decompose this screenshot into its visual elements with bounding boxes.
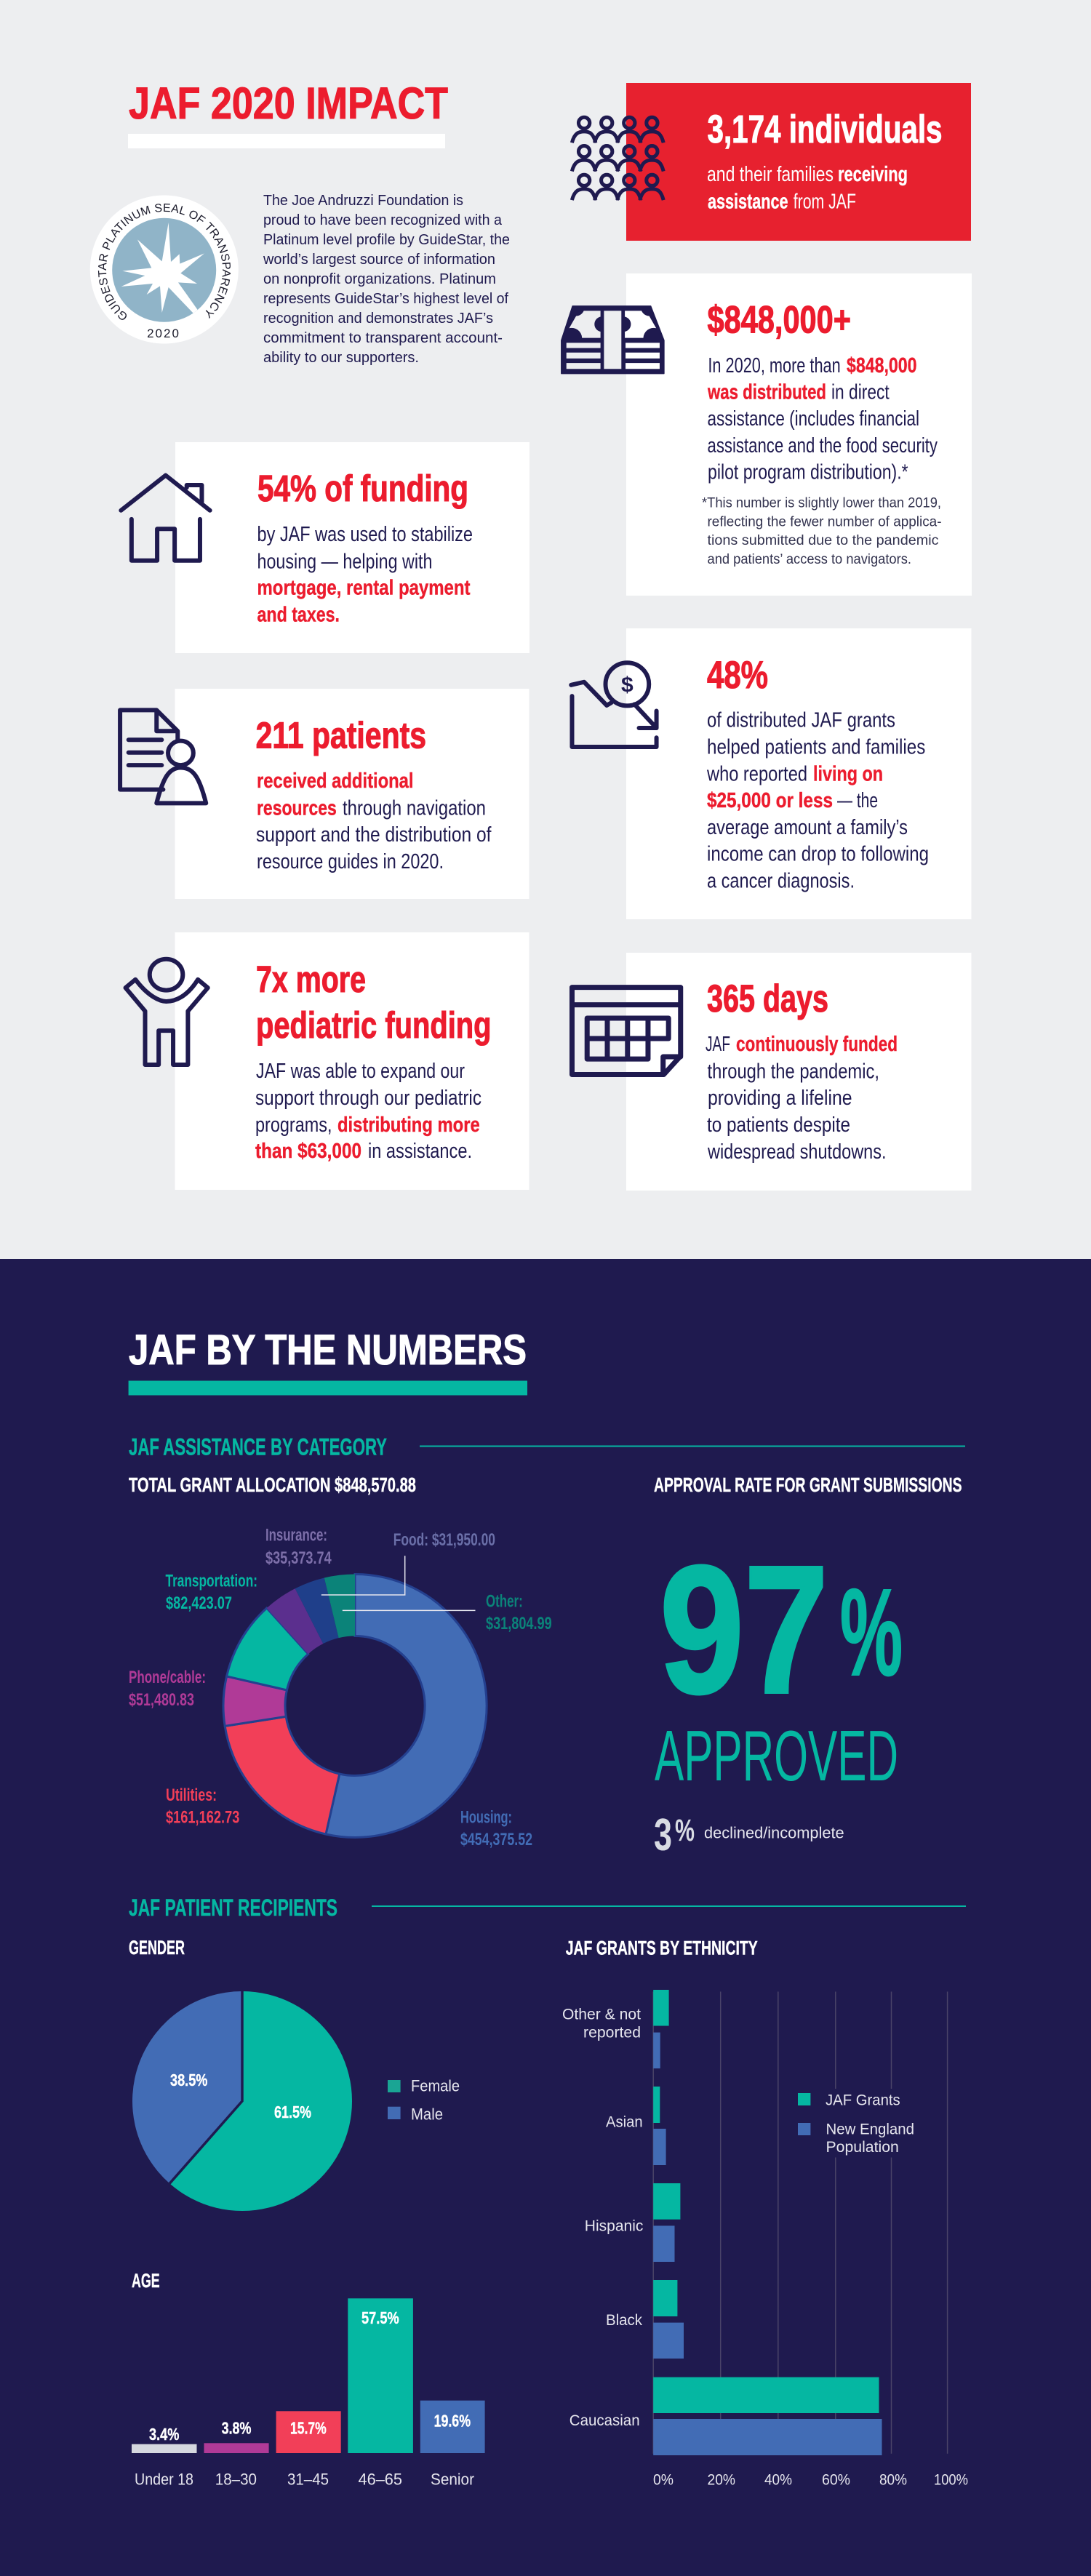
panel: 211 patients: support and the distribution of xyxy=(256,823,492,847)
panel: 365 days: 365 days xyxy=(707,977,828,1020)
bar chart: age: Senior xyxy=(431,2471,474,2489)
panel: $848,000+: $848,000 xyxy=(847,354,916,377)
panel: 54% of funding: 54% of funding xyxy=(257,468,468,509)
panel: 54% of funding xyxy=(121,442,529,653)
bar chart: age: 18–30 xyxy=(215,2471,257,2489)
bar chart: age xyxy=(132,2298,485,2489)
footnote xyxy=(702,496,941,567)
title: JAF 2020 Impact xyxy=(128,79,448,148)
subheading: total grant allocation: TOTAL GRANT ALLOCATION $848,570.88 xyxy=(129,1473,416,1496)
bar chart: grants by ethnicity: Other & not xyxy=(562,2007,641,2023)
subheading: approval rate: APPROVAL RATE FOR GRANT SUBMISSIONS xyxy=(654,1473,962,1496)
panel: 48% of grants xyxy=(571,628,972,919)
bar chart: grants by ethnicity: Black xyxy=(606,2312,642,2329)
icon: group of people xyxy=(572,117,663,200)
bar chart: age: 46–65 xyxy=(358,2471,402,2489)
panel: 7x more pediatric funding: than $63,000 xyxy=(255,1140,361,1163)
panel: 365 days: widespread shutdowns. xyxy=(707,1140,886,1164)
bar chart: grants by ethnicity: Asian xyxy=(606,2114,643,2131)
legend: ethnicity xyxy=(798,2092,914,2156)
donut labels: $82,423.07 xyxy=(166,1593,232,1613)
text block: GuideStar description: on nonprofit organizations. Platinum xyxy=(263,271,496,287)
panel: 48% of grants: 48% xyxy=(707,654,768,697)
bar chart: grants by ethnicity: 60% xyxy=(822,2471,850,2489)
heading: JAF assistance by category: JAF ASSISTANCE BY CATEGORY xyxy=(129,1434,387,1460)
subheading: age: AGE xyxy=(132,2270,160,2292)
panel: 211 patients: resources xyxy=(257,796,337,820)
bar chart: grants by ethnicity: 40% xyxy=(764,2471,792,2489)
panel: $848,000+: assistance (includes financial xyxy=(707,407,919,431)
bar chart: grants by ethnicity: Caucasian xyxy=(570,2412,640,2429)
stat: 3% declined xyxy=(654,1810,844,1860)
panel: 7x more pediatric funding: JAF was able to expand our xyxy=(256,1060,465,1083)
panel: 54% of funding: by JAF was used to stabilize xyxy=(257,523,473,546)
panel: $848,000+: In 2020, more than xyxy=(708,354,841,377)
bar chart: grants by ethnicity: Hispanic xyxy=(585,2218,643,2235)
icon: calendar xyxy=(572,988,681,1075)
panel: 365 days: continuously funded xyxy=(736,1033,898,1056)
panel: 7x more pediatric funding xyxy=(126,932,529,1190)
text block: GuideStar description: proud to have been recognized with a xyxy=(263,212,503,228)
bar chart: age: 31–45 xyxy=(287,2471,329,2489)
section background: numbers xyxy=(0,1259,1091,2576)
text block: GuideStar description: commitment to transparent account- xyxy=(263,330,503,346)
panel: 48% of grants: $25,000 or less xyxy=(707,789,833,812)
panel: $848,000+: assistance and the food security xyxy=(707,434,938,457)
panel: 7x more pediatric funding: distributing more xyxy=(337,1113,480,1137)
icon: GuideStar platinum seal: GUIDESTAR PLATINUM SEAL OF TRANSPARENCY xyxy=(97,204,231,320)
text block: GuideStar description xyxy=(263,193,510,366)
icon: stack of money xyxy=(562,306,664,373)
footnote: *This number is slightly lower than 2019, xyxy=(702,496,941,511)
panel: $848,000+: in direct xyxy=(831,380,890,404)
stat: 3% declined: % xyxy=(675,1813,695,1848)
text block: GuideStar description: The Joe Andruzzi Foundation is xyxy=(263,193,463,209)
heading: JAF by the numbers xyxy=(129,1327,527,1395)
panel: 48% of grants: helped patients and families xyxy=(707,736,925,759)
donut labels: Insurance: xyxy=(265,1525,327,1545)
stat: 97% approved: APPROVED xyxy=(655,1716,898,1796)
panel: 48% of grants: a cancer diagnosis. xyxy=(707,869,855,892)
panel: 7x more pediatric funding: programs, xyxy=(255,1113,332,1137)
donut labels: $454,375.52 xyxy=(460,1830,532,1849)
icon: house xyxy=(121,476,210,561)
bar chart: grants by ethnicity: reported xyxy=(583,2025,641,2041)
stat: 97% approved xyxy=(655,1528,903,1796)
donut labels: $31,804.99 xyxy=(486,1614,552,1633)
panel: 211 patients: received additional xyxy=(257,769,413,793)
panel: 365 days xyxy=(572,953,972,1191)
panel: $848,000+ xyxy=(562,273,972,596)
icon: falling income with magnifier xyxy=(571,663,657,747)
subheading: grants by ethnicity: JAF GRANTS BY ETHNICITY xyxy=(566,1937,758,1959)
panel: 365 days: to patients despite xyxy=(707,1113,850,1137)
donut labels: $51,480.83 xyxy=(129,1690,194,1710)
bar chart: age: 57.5% xyxy=(361,2308,399,2327)
panel: 365 days: JAF xyxy=(706,1033,730,1056)
donut labels: Utilities: xyxy=(166,1785,217,1805)
bar chart: age: 19.6% xyxy=(434,2412,471,2431)
panel: 3,174 individuals: and their families xyxy=(707,163,834,186)
legend: ethnicity: New England xyxy=(826,2121,914,2137)
donut labels: Transportation: xyxy=(166,1572,257,1591)
panel: 3,174 individuals: receiving xyxy=(838,163,908,186)
panel: 48% of grants: average amount a family’s xyxy=(707,816,908,839)
text block: GuideStar description: ability to our supporters. xyxy=(263,350,419,366)
panel: 54% of funding: and taxes. xyxy=(257,604,340,627)
bar chart: grants by ethnicity: 20% xyxy=(707,2471,735,2489)
panel: 3,174 individuals: 3,174 individuals xyxy=(707,108,943,151)
panel: 48% of grants: living on xyxy=(813,762,883,785)
legend: gender: Female xyxy=(411,2077,460,2095)
bar chart: grants by ethnicity xyxy=(562,1990,968,2489)
panel: $848,000+: $848,000+ xyxy=(707,298,851,342)
stat: 97% approved: 97 xyxy=(660,1528,828,1731)
panel: 54% of funding: housing — helping with xyxy=(257,550,432,573)
icon: document and person xyxy=(120,710,206,803)
icon: child with raised arms xyxy=(126,959,208,1065)
text block: GuideStar description: recognition and demonstrates JAF’s xyxy=(263,311,493,327)
donut labels: $35,373.74 xyxy=(265,1548,332,1568)
donut labels xyxy=(129,1525,552,1849)
bar chart: age: 3.8% xyxy=(222,2419,252,2438)
panel: 211 patients xyxy=(120,689,529,899)
section background: impact xyxy=(0,0,1091,1259)
panel: 48% of grants: income can drop to following xyxy=(707,843,929,866)
title: JAF 2020 Impact: JAF 2020 IMPACT xyxy=(129,79,448,128)
panel: 365 days: through the pandemic, xyxy=(707,1060,879,1084)
donut chart: assistance by category xyxy=(223,1556,487,1837)
panel: 48% of grants: — the xyxy=(837,789,878,812)
bar chart: grants by ethnicity: 0% xyxy=(653,2471,674,2489)
panel: 7x more pediatric funding: pediatric funding xyxy=(256,1004,492,1046)
panel: 211 patients: 211 patients xyxy=(256,715,426,756)
panel: 54% of funding: mortgage, rental payment xyxy=(257,577,471,600)
donut labels: Phone/cable: xyxy=(129,1668,206,1687)
donut labels: Food: $31,950.00 xyxy=(393,1530,495,1550)
panel: 7x more pediatric funding: in assistance. xyxy=(368,1140,472,1163)
text block: GuideStar description: represents GuideStar’s highest level of xyxy=(263,291,508,307)
stat: 3% declined: declined/incomplete xyxy=(704,1824,844,1841)
subheading: gender: GENDER xyxy=(129,1937,185,1959)
heading: JAF patient recipients: JAF PATIENT RECIPIENTS xyxy=(129,1895,337,1921)
legend: gender: Male xyxy=(411,2105,443,2124)
panel: 3,174 individuals xyxy=(572,83,971,241)
pie chart: gender: 38.5% xyxy=(170,2071,207,2089)
panel: 48% of grants: of distributed JAF grants xyxy=(707,708,895,732)
pie chart: gender xyxy=(132,1990,352,2211)
bar chart: age: 15.7% xyxy=(290,2419,327,2438)
panel: 48% of grants: who reported xyxy=(706,762,807,785)
donut labels: Other: xyxy=(486,1591,523,1612)
bar chart: age: Under 18 xyxy=(135,2471,193,2489)
text block: GuideStar description: world’s largest source of information xyxy=(263,252,495,268)
panel: 7x more pediatric funding: support through our pediatric xyxy=(255,1087,481,1110)
panel: 7x more pediatric funding: 7x more xyxy=(256,959,366,1000)
panel: 3,174 individuals: assistance xyxy=(708,191,788,214)
heading: JAF by the numbers: JAF BY THE NUMBERS xyxy=(129,1327,527,1374)
legend: ethnicity: JAF Grants xyxy=(826,2092,900,2109)
panel: $848,000+: was distributed xyxy=(707,380,826,404)
footnote: tions submitted due to the pandemic xyxy=(707,533,938,548)
panel: $848,000+: pilot program distribution).* xyxy=(708,460,908,484)
donut labels: Housing: xyxy=(460,1808,512,1827)
pie chart: gender: 61.5% xyxy=(274,2103,311,2121)
bar chart: grants by ethnicity: 80% xyxy=(879,2471,907,2489)
footnote: and patients’ access to navigators. xyxy=(707,552,911,567)
legend: gender xyxy=(388,2077,460,2124)
icon: falling income with magnifier: $ xyxy=(621,673,634,697)
donut labels: $161,162.73 xyxy=(166,1808,239,1827)
stat: 3% declined: 3 xyxy=(654,1810,672,1860)
panel: 211 patients: resource guides in 2020. xyxy=(257,850,444,873)
panel: 211 patients: through navigation xyxy=(343,796,486,820)
icon: GuideStar platinum seal: 2020 xyxy=(147,327,180,340)
bar chart: grants by ethnicity: 100% xyxy=(934,2471,968,2489)
footnote: reflecting the fewer number of applica- xyxy=(707,515,941,529)
text block: GuideStar description: Platinum level profile by GuideStar, the xyxy=(263,232,510,248)
panel: 3,174 individuals: from JAF xyxy=(794,191,856,214)
legend: ethnicity: Population xyxy=(826,2139,899,2156)
panel: 365 days: providing a lifeline xyxy=(708,1087,852,1110)
stat: 97% approved: % xyxy=(840,1564,903,1702)
bar chart: age: 3.4% xyxy=(149,2425,179,2444)
